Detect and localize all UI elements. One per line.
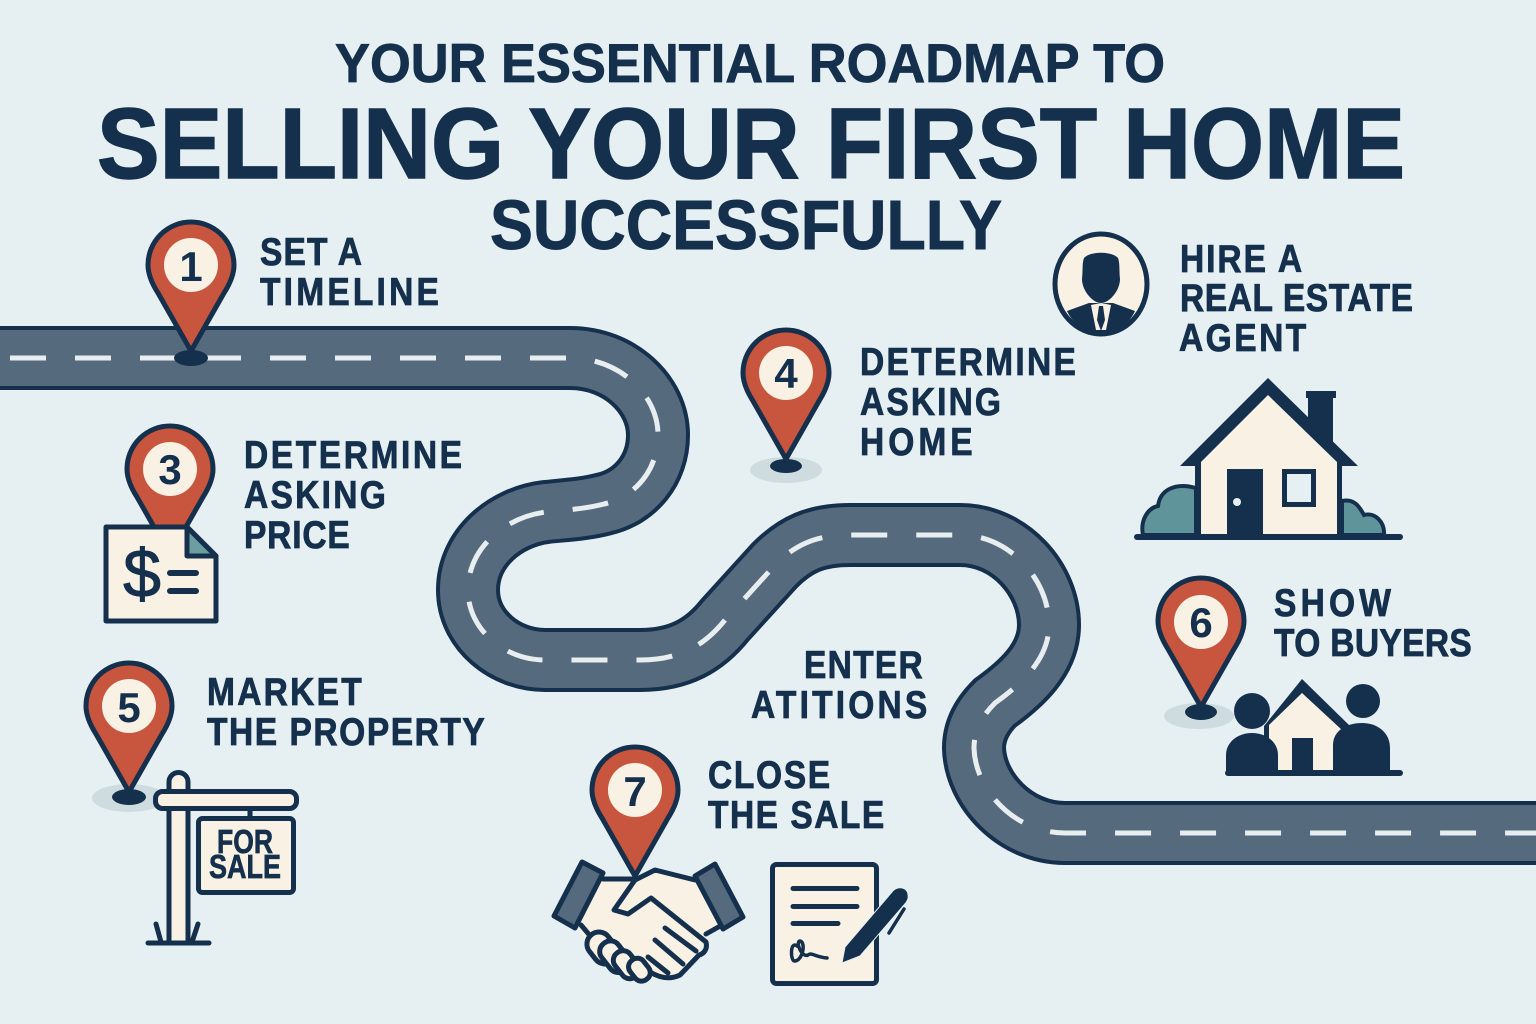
step 2: hire a real estate agent: HIRE A xyxy=(1180,237,1302,281)
step 7: close the sale: CLOSE xyxy=(708,753,830,797)
step 1: set a timeline: 1 xyxy=(179,243,203,290)
step 3: determine asking price: PRICE xyxy=(244,513,350,557)
step 3: determine asking price: ASKING xyxy=(244,473,386,517)
step 5: market the property: 5 xyxy=(117,684,141,731)
step 4: determine asking home: 4 xyxy=(774,350,798,397)
icon: handshake xyxy=(554,862,743,984)
step 6: show to buyers: SHOW xyxy=(1274,581,1392,625)
step 4: determine asking home xyxy=(743,330,1076,483)
icon: house with bushes xyxy=(1137,378,1400,537)
step 1: set a timeline xyxy=(148,222,439,366)
title: SUCCESSFULLY xyxy=(490,186,1002,264)
partial label: enter atitions: ENTER xyxy=(804,643,923,687)
step 7: close the sale: 7 xyxy=(623,768,647,815)
step 7: close the sale: THE SALE xyxy=(708,793,884,837)
step 3: determine asking price xyxy=(106,426,462,621)
step 5: market the property xyxy=(86,663,485,812)
winding road xyxy=(0,358,1536,833)
step 4: determine asking home: HOME xyxy=(860,420,973,464)
step 3: determine asking price: 3 xyxy=(158,446,182,493)
icon: price document: $ xyxy=(123,536,161,612)
partial label: enter atitions xyxy=(751,643,927,727)
step 4: determine asking home: ASKING xyxy=(860,380,1001,424)
step 2: hire a real estate agent: AGENT xyxy=(1179,316,1306,360)
icon: contract and pen xyxy=(772,864,908,984)
step 1: set a timeline: TIMELINE xyxy=(260,270,439,314)
partial label: enter atitions: ATITIONS xyxy=(751,683,927,727)
step 7: close the sale xyxy=(554,747,908,984)
step 6: show to buyers: 6 xyxy=(1189,599,1213,646)
icon: agent portrait xyxy=(1055,234,1147,334)
step 6: show to buyers: TO BUYERS xyxy=(1274,621,1472,665)
step 3: determine asking price: DETERMINE xyxy=(244,433,462,477)
step 5: market the property: THE PROPERTY xyxy=(207,710,485,754)
step 2: hire a real estate agent: REAL ESTATE xyxy=(1180,276,1413,320)
icon: for sale sign: SALE xyxy=(209,848,281,885)
step 2: hire a real estate agent xyxy=(1055,234,1413,360)
icon: for sale sign xyxy=(148,772,296,943)
step 4: determine asking home: DETERMINE xyxy=(860,340,1076,384)
title xyxy=(97,32,1405,264)
icon: buyers with house xyxy=(1226,679,1400,775)
step 5: market the property: MARKET xyxy=(207,670,362,714)
icon: price document xyxy=(106,527,216,621)
icon: for sale sign: FOR xyxy=(217,823,273,860)
step 1: set a timeline: SET A xyxy=(260,230,362,274)
step 6: show to buyers xyxy=(1158,578,1472,775)
title: SELLING YOUR FIRST HOME xyxy=(97,88,1405,200)
title: YOUR ESSENTIAL ROADMAP TO xyxy=(335,32,1165,94)
